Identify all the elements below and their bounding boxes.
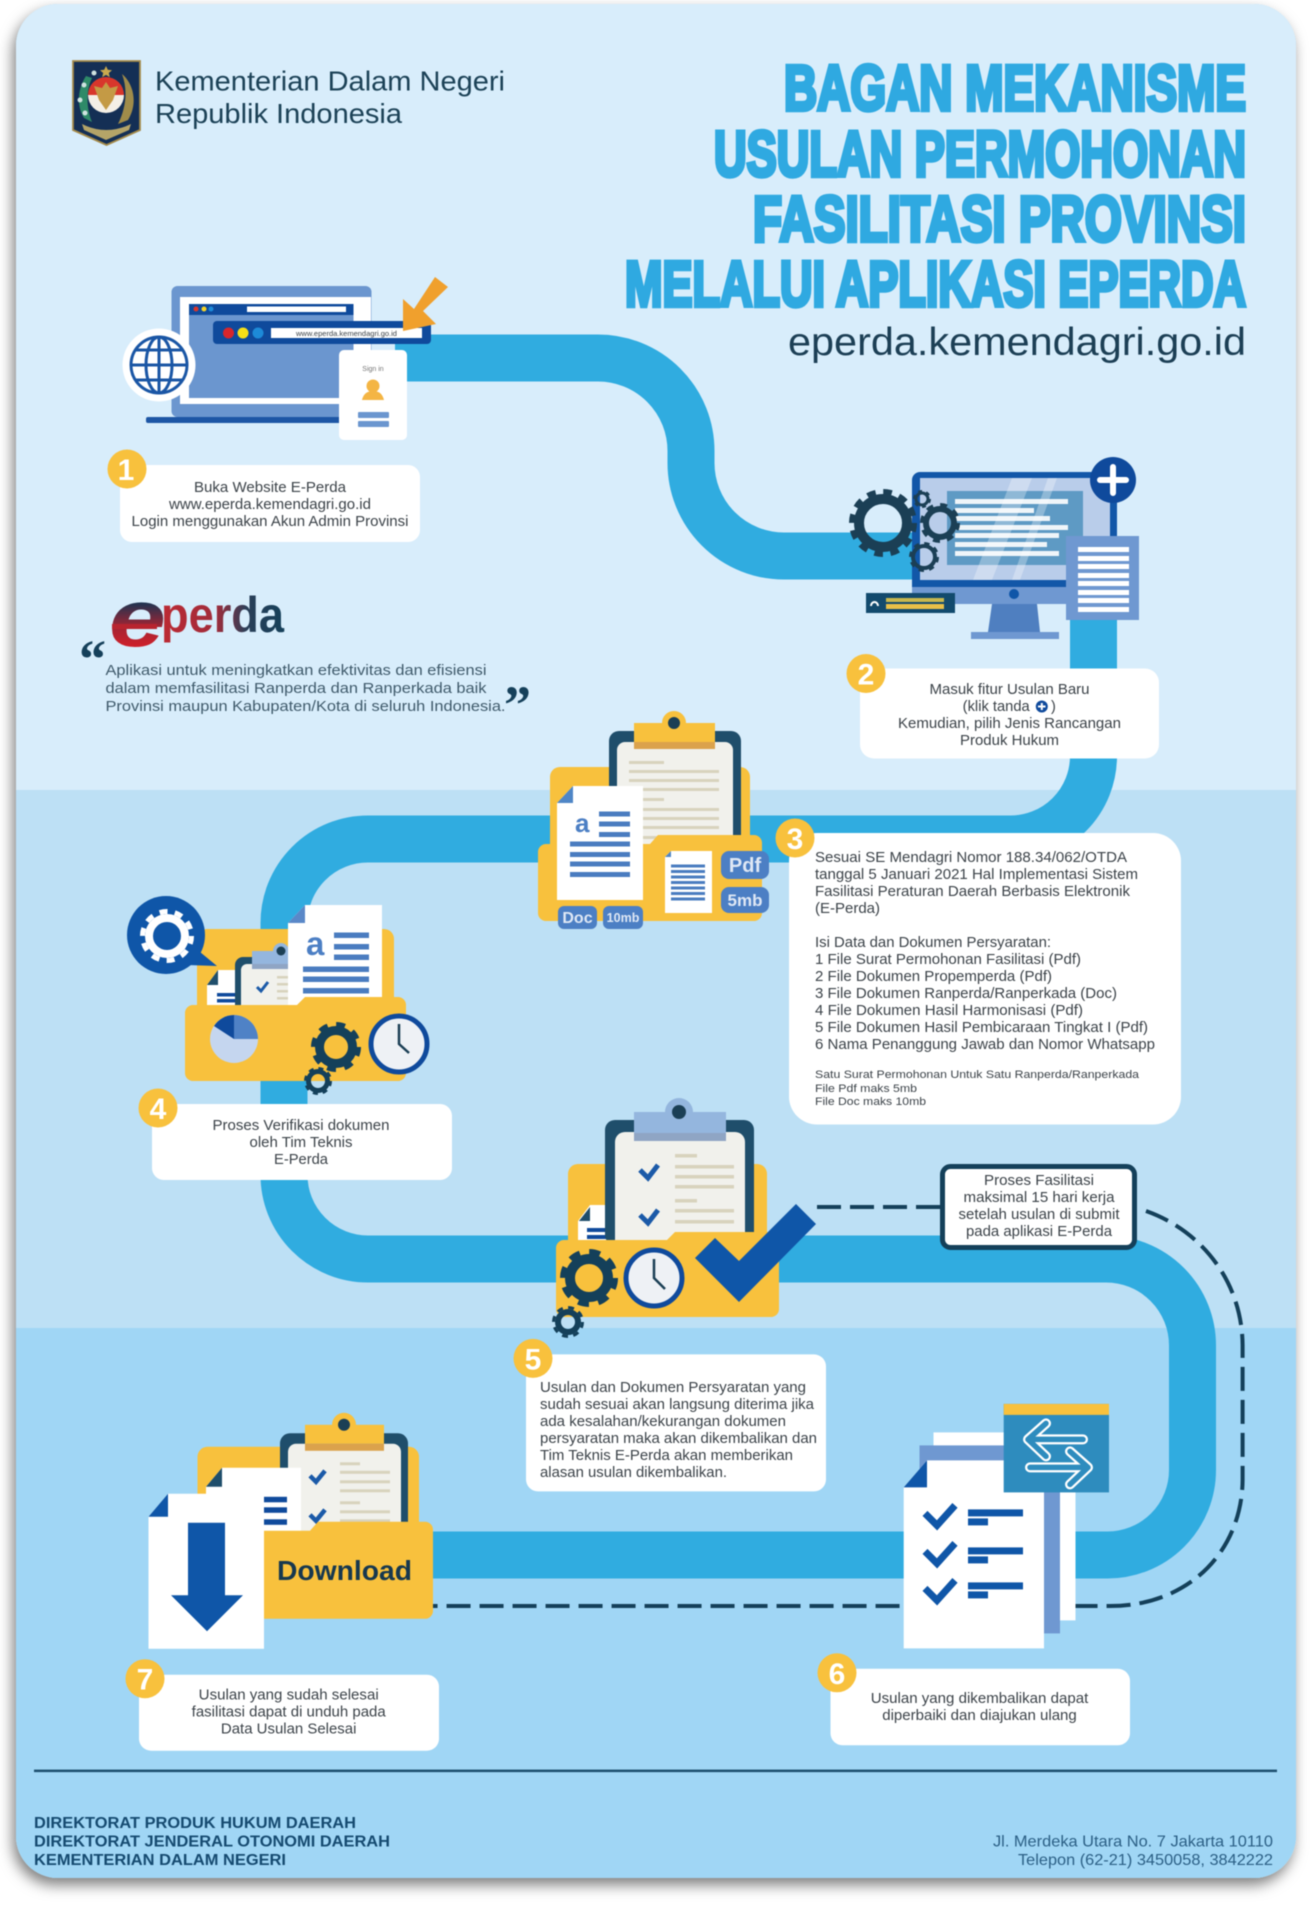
sign in card <box>339 350 407 440</box>
eperda logo: e <box>109 573 166 664</box>
quote: “ <box>79 629 106 689</box>
step 1 callout: Login menggunakan Akun Admin Provinsi <box>132 514 408 530</box>
step 1 callout <box>108 450 420 542</box>
dashed return line <box>433 1207 1243 1606</box>
eperda logo: perda <box>161 587 285 643</box>
badges: Doc <box>562 910 593 927</box>
step number 6 <box>818 1653 856 1692</box>
icon: laptop login <box>122 277 448 440</box>
icon: returned checklist <box>904 1404 1109 1648</box>
step 3 callout: File Pdf maks 5mb <box>815 1083 917 1095</box>
step 3 callout: Fasilitasi Peraturan Daerah Berbasis Elektronik <box>815 884 1131 900</box>
step number 4 <box>138 1088 178 1128</box>
word document <box>288 905 382 1005</box>
word document: a <box>306 925 325 962</box>
small clipboard <box>235 943 300 1005</box>
step 7 callout: Data Usulan Selesai <box>221 1722 356 1738</box>
step number 6: 6 <box>829 1658 845 1691</box>
step 4 callout <box>138 1088 452 1180</box>
review period callout: setelah usulan di submit <box>958 1207 1120 1223</box>
step 5 callout: persyaratan maka akan dikembalikan dan <box>540 1431 817 1447</box>
ministry name: Kementerian Dalam Negeri <box>155 66 505 96</box>
step 2 callout: Masuk fitur Usulan Baru <box>930 682 1090 698</box>
step 5 callout: alasan usulan dikembalikan. <box>540 1465 727 1481</box>
icon: inline plus <box>1036 700 1048 712</box>
clock <box>371 1016 427 1072</box>
clipboard <box>605 1098 754 1245</box>
review period callout: Proses Fasilitasi <box>984 1173 1094 1189</box>
download label: Download <box>277 1555 412 1586</box>
step number 7 <box>126 1659 164 1698</box>
word document <box>557 786 643 900</box>
step 3 callout: 2 File Dokumen Propemperda (Pdf) <box>815 969 1052 985</box>
pdf document <box>665 851 712 913</box>
step 2 callout: Kemudian, pilih Jenis Rancangan <box>898 716 1121 732</box>
document panel <box>1066 536 1139 620</box>
step 3 callout: (E-Perda) <box>815 901 880 917</box>
step 1 callout: Buka Website E-Perda <box>194 480 347 496</box>
step 6 callout: Usulan yang dikembalikan dapat <box>871 1691 1088 1707</box>
review period callout: pada aplikasi E-Perda <box>966 1224 1113 1240</box>
step 5 callout: sudah sesuai akan langsung diterima jika <box>540 1397 815 1413</box>
step 3 callout: Satu Surat Permohonan Untuk Satu Ranperda/Ranperkada <box>815 1069 1140 1081</box>
step 5 callout: Tim Teknis E-Perda akan memberikan <box>540 1448 793 1464</box>
pie chart <box>210 1015 258 1063</box>
ministry name <box>155 66 505 129</box>
middle document <box>206 1468 301 1534</box>
step number 5 <box>514 1339 552 1378</box>
quote: Provinsi maupun Kabupaten/Kota di seluruh Indonesia. <box>106 698 506 715</box>
sign in card: Sign in <box>362 366 384 373</box>
badges: 10mb <box>607 911 640 925</box>
icon: plus button <box>1090 457 1136 503</box>
clipboard <box>280 1413 408 1534</box>
badges <box>558 851 769 929</box>
ministry name: Republik Indonesia <box>155 98 402 129</box>
footer organisation: DIREKTORAT PRODUK HUKUM DAERAH <box>34 1815 356 1832</box>
step number 2: 2 <box>858 658 874 692</box>
icon: verification folder <box>127 896 427 1094</box>
footer address <box>993 1834 1273 1869</box>
quote: dalam memfasilitasi Ranperda dan Ranperkada baik <box>106 680 487 697</box>
step 3 callout <box>776 818 1181 1124</box>
step 3 callout: File Doc maks 10mb <box>815 1096 926 1108</box>
step 3 callout: 6 Nama Penanggung Jawab dan Nomor Whatsapp <box>815 1037 1155 1053</box>
step 5 callout: Usulan dan Dokumen Persyaratan yang <box>540 1380 806 1396</box>
badges: 5mb <box>728 891 762 910</box>
step number 7: 7 <box>137 1664 153 1697</box>
step 3 callout: tanggal 5 Januari 2021 Hal Implementasi Sistem <box>815 867 1138 883</box>
step number 3: 3 <box>787 823 803 856</box>
icon: download folder <box>148 1413 433 1649</box>
website url: eperda.kemendagri.go.id <box>788 321 1246 364</box>
step 4 callout: Proses Verifikasi dokumen <box>212 1118 390 1134</box>
step 5 callout: ada kesalahan/kekurangan dokumen <box>540 1414 786 1430</box>
step 3 callout: 1 File Surat Permohonan Fasilitasi (Pdf) <box>815 952 1081 968</box>
eperda logo <box>109 573 285 664</box>
step 1 callout: www.eperda.kemendagri.go.id <box>168 497 371 513</box>
step 5 callout <box>514 1339 826 1491</box>
front document with arrow <box>148 1494 264 1649</box>
step 7 callout <box>126 1659 439 1751</box>
footer address: Telepon (62-21) 3450058, 3842222 <box>1018 1852 1273 1869</box>
step 7 callout: Usulan yang sudah selesai <box>199 1688 379 1704</box>
footer organisation <box>34 1815 390 1869</box>
title <box>625 52 1246 320</box>
footer address: Jl. Merdeka Utara No. 7 Jakarta 10110 <box>993 1834 1273 1851</box>
icon: globe <box>122 328 196 402</box>
word document: a <box>575 808 590 838</box>
icon: monitor with gears <box>852 457 1139 640</box>
step 3 callout: 3 File Dokumen Ranperda/Ranperkada (Doc) <box>815 986 1117 1002</box>
clock <box>626 1250 682 1306</box>
gears <box>306 1024 358 1094</box>
step 6 callout: diperbaiki dan diajukan ulang <box>882 1708 1077 1724</box>
step 7 callout: fasilitasi dapat di unduh pada <box>192 1705 387 1721</box>
step number 4: 4 <box>150 1093 167 1126</box>
step number 3 <box>776 818 814 858</box>
process road <box>284 358 1192 1555</box>
icon: orange arrow <box>403 277 448 331</box>
step number 2 <box>846 654 886 693</box>
step 3 callout: Isi Data dan Dokumen Persyaratan: <box>815 935 1051 951</box>
small document <box>578 1205 610 1242</box>
step 4 callout: oleh Tim Teknis <box>250 1135 352 1151</box>
footer organisation: KEMENTERIAN DALAM NEGERI <box>34 1852 286 1869</box>
icon: approval folder <box>554 1098 816 1336</box>
step 6 callout <box>818 1653 1130 1745</box>
quote: ” <box>504 675 531 735</box>
browser address bar: www.eperda.kemendagri.go.id <box>295 329 397 338</box>
review period callout <box>942 1166 1134 1248</box>
step 3 callout: Sesuai SE Mendagri Nomor 188.34/062/OTDA <box>815 850 1127 866</box>
icon: gears <box>852 491 958 570</box>
quote: Aplikasi untuk meningkatkan efektivitas dan efisiensi <box>106 662 487 679</box>
status bar <box>866 593 955 613</box>
exchange arrows panel <box>1004 1404 1109 1492</box>
step 3 callout: 5 File Dokumen Hasil Pembicaraan Tingkat I (Pdf) <box>815 1020 1148 1036</box>
step number 1: 1 <box>118 454 134 487</box>
step number 5: 5 <box>525 1343 541 1376</box>
step 2 callout: ) <box>1051 699 1056 715</box>
step 3 callout: 4 File Dokumen Hasil Harmonisasi (Pdf) <box>815 1003 1083 1019</box>
quote <box>79 629 531 735</box>
step 2 callout <box>846 654 1159 758</box>
review period callout: maksimal 15 hari kerja <box>964 1190 1115 1206</box>
step 2 callout: Produk Hukum <box>960 733 1059 749</box>
icon: document folder doc pdf <box>538 711 769 929</box>
ministry emblem <box>73 61 140 145</box>
footer organisation: DIREKTORAT JENDERAL OTONOMI DAERAH <box>34 1834 390 1851</box>
step 2 callout: (klik tanda <box>963 699 1031 715</box>
speech bubble gear <box>127 896 217 974</box>
icon: large check mark <box>695 1204 816 1302</box>
clipboard <box>609 711 741 850</box>
small document <box>207 970 240 1006</box>
step number 1 <box>108 450 146 488</box>
badges: Pdf <box>729 855 761 877</box>
gears <box>554 1252 615 1336</box>
step 4 callout: E-Perda <box>274 1152 329 1168</box>
browser address bar <box>213 321 431 344</box>
